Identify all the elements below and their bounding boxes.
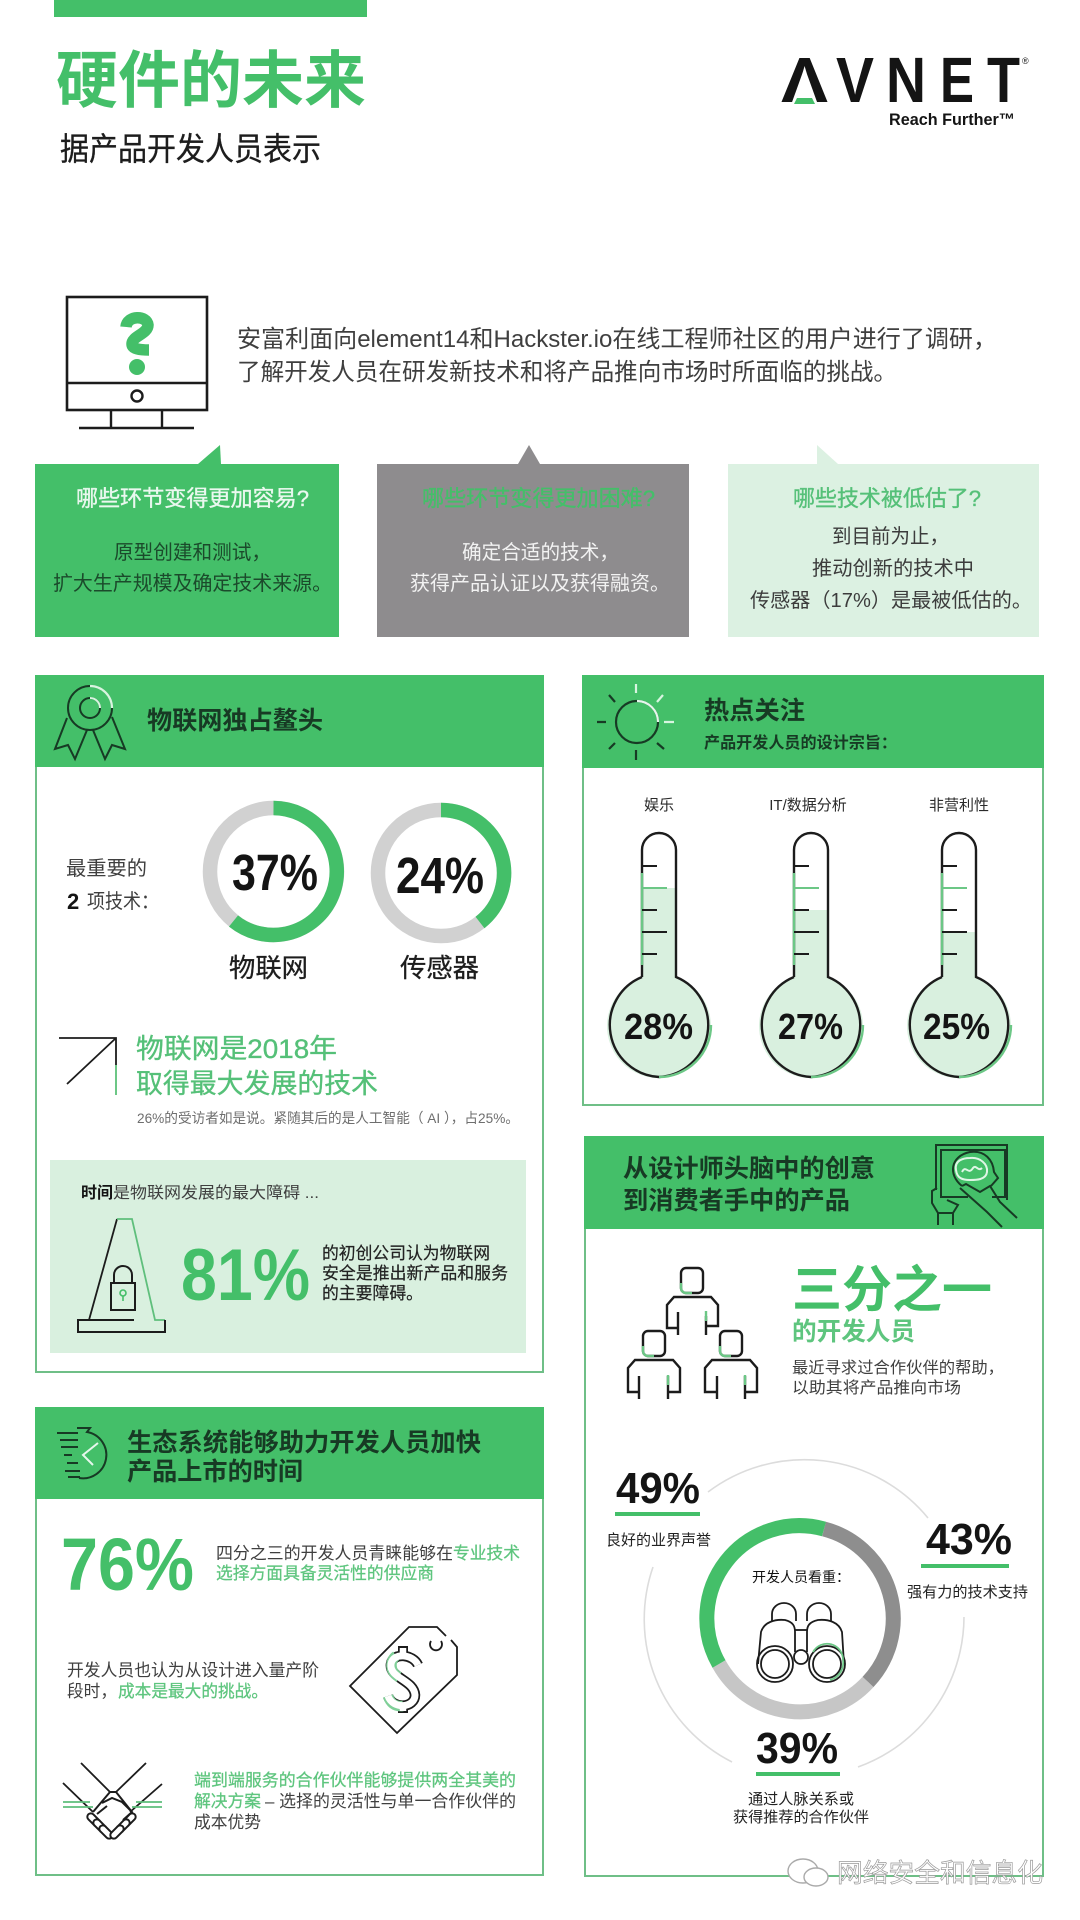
- icon: monitor with question mark: [67, 297, 207, 428]
- panel: easier: [35, 445, 339, 637]
- body: easier: 扩大生产规模及确定技术来源。: [53, 572, 332, 595]
- icon: fast clock: [57, 1428, 106, 1478]
- icon: growth arrow: [59, 1038, 116, 1095]
- thermometer: IT/data analytics 27%: 27%: [778, 1006, 843, 1047]
- logo: Avnet: [781, 44, 1029, 129]
- logo: Avnet: ®: [1022, 56, 1029, 66]
- text: end-to-end partner: 成本优势: [194, 1813, 261, 1832]
- text: end-to-end partner: [194, 1771, 516, 1832]
- donut: 37% IoT: [210, 808, 337, 935]
- text: end-to-end partner: 解决方案: [194, 1792, 261, 1811]
- thermometer: non-profit 25%: 25%: [923, 1006, 990, 1047]
- stat: 39% referrals: [733, 1724, 869, 1826]
- callout: time barrier: [50, 1160, 526, 1353]
- body: underestimated: 传感器（17%）是最被低估的。: [750, 589, 1032, 612]
- thermometer: non-profit 25%: [907, 797, 1011, 1078]
- stat: 43% tech support: [907, 1515, 1028, 1601]
- heading: ecosystem: [127, 1429, 481, 1486]
- stat description: 的初创公司认为物联网: [322, 1244, 490, 1263]
- text: top 2 technologies: 最重要的: [66, 857, 147, 880]
- thermometer: entertainment 28%: 28%: [624, 1006, 693, 1047]
- stat: 39% referrals: 获得推荐的合作伙伴: [733, 1809, 869, 1826]
- panel: harder: [377, 445, 689, 637]
- body: harder: 确定合适的技术，: [462, 541, 619, 564]
- subheading: hot topics: 产品开发人员的设计宗旨：: [704, 733, 897, 752]
- heading: ecosystem: 生态系统能够助力开发人员加快: [127, 1429, 481, 1457]
- title: 硬件的未来: [56, 47, 366, 116]
- logo: Avnet: Λ: [781, 44, 828, 116]
- stat: 39% referrals: 39%: [756, 1724, 838, 1773]
- green statement: 取得最大发展的技术: [136, 1069, 378, 1099]
- body: easier: 原型创建和测试，: [114, 541, 271, 564]
- logo: Avnet: V: [836, 44, 874, 116]
- donut: 37% IoT: 37%: [232, 844, 318, 901]
- icon: sun: [597, 684, 674, 760]
- body: underestimated: 推动创新的技术中: [812, 557, 974, 580]
- text: sought partner help: [792, 1359, 1004, 1397]
- thermometer: entertainment 28%: 娱乐: [644, 797, 674, 814]
- callout heading: 时间: [81, 1184, 113, 1202]
- body: underestimated: [750, 525, 1032, 612]
- thermometer: entertainment 28%: [607, 797, 711, 1078]
- label: IoT: 物联网: [229, 953, 308, 983]
- text: end-to-end partner: – 选择的灵活性与单一合作伙伴的: [265, 1792, 516, 1811]
- body: underestimated: 到目前为止，: [832, 525, 949, 548]
- green statement: 物联网是2018年: [136, 1034, 337, 1064]
- stat: 43% tech support: 强有力的技术支持: [907, 1584, 1028, 1601]
- heading: underestimated: 哪些技术被低估了?: [793, 486, 981, 511]
- logo: Avnet: Reach Further™: [889, 111, 1015, 129]
- icon: price tag: [350, 1627, 457, 1733]
- panel: hot topics: [582, 675, 1044, 1105]
- icon: tablet with brain: [932, 1145, 1017, 1227]
- icon: award ribbon: [55, 686, 125, 759]
- icon: binoculars: [757, 1603, 845, 1682]
- body: easier: [53, 541, 332, 595]
- donut: 24% sensors: 24%: [396, 847, 484, 904]
- stat: 76%: 76%: [61, 1523, 194, 1606]
- heading: idea to product: [623, 1154, 875, 1215]
- text: sought partner help: 最近寻求过合作伙伴的帮助，: [792, 1359, 1004, 1377]
- center label: 开发人员看重：: [752, 1569, 850, 1585]
- stat: 43% tech support: 43%: [926, 1515, 1012, 1564]
- text: flexible suppliers: [216, 1544, 520, 1583]
- heading: ecosystem: 产品上市的时间: [127, 1458, 303, 1486]
- intro text: 了解开发人员在研发新技术和将产品推向市场时所面临的挑战。: [237, 359, 897, 386]
- label: sensors: 传感器: [400, 953, 479, 983]
- panel: IoT: [35, 675, 544, 1372]
- text: top 2 technologies: [66, 857, 159, 914]
- thermometer: IT/data analytics 27%: IT/数据分析: [769, 797, 847, 814]
- icon: three people: [628, 1268, 757, 1399]
- small note: 26%的受访者如是说。紧随其后的是人工智能（ AI ），占25%。: [137, 1110, 519, 1126]
- thermometer: non-profit 25%: 非营利性: [929, 797, 989, 814]
- body: harder: 获得产品认证以及获得融资。: [410, 572, 670, 595]
- heading: easier: 哪些环节变得更加容易?: [76, 486, 309, 511]
- subtitle: 据产品开发人员表示: [60, 131, 321, 167]
- green statement: [136, 1034, 378, 1099]
- text: cost challenge: 段时，: [67, 1682, 117, 1701]
- stat: 49% reputation: 良好的业界声誉: [606, 1531, 711, 1549]
- text: flexible suppliers: 专业技术: [453, 1544, 520, 1563]
- panel: ecosystem: [35, 1407, 544, 1875]
- text: top 2 technologies: 2: [67, 889, 79, 914]
- panel: idea to product: [584, 1136, 1044, 1876]
- body: harder: [410, 541, 670, 595]
- text: flexible suppliers: 四分之三的开发人员青睐能够在: [216, 1544, 453, 1563]
- logo: Avnet: T: [987, 44, 1020, 116]
- text: end-to-end partner: 端到端服务的合作伙伴能够提供两全其美的: [194, 1771, 516, 1790]
- watermark: 网络安全和信息化: [837, 1858, 1043, 1888]
- text: cost challenge: [67, 1661, 319, 1701]
- icon: handshake: [63, 1763, 162, 1840]
- text: sought partner help: 以助其将产品推向市场: [792, 1379, 961, 1397]
- stat: one third: 三分之一: [792, 1262, 992, 1318]
- heading: harder: 哪些环节变得更加困难?: [422, 486, 655, 511]
- text: cost challenge: 开发人员也认为从设计进入量产阶: [67, 1661, 319, 1680]
- text: top 2 technologies: 项技术：: [87, 890, 159, 913]
- icon: cone with lock: [78, 1219, 165, 1332]
- logo: Avnet: E: [940, 44, 974, 116]
- stat: 49% reputation: 49%: [616, 1464, 700, 1513]
- heading: IoT: 物联网独占鳌头: [147, 707, 323, 735]
- logo: Avnet: N: [886, 44, 926, 116]
- stat description: 的主要障碍。: [322, 1284, 423, 1303]
- thermometer: IT/data analytics 27%: [759, 797, 863, 1078]
- intro text: [237, 326, 997, 386]
- stat: 81%: 81%: [181, 1235, 310, 1316]
- heading: idea to product: 到消费者手中的产品: [623, 1187, 850, 1215]
- stat: developers: 的开发人员: [792, 1318, 915, 1346]
- stat description: [322, 1244, 508, 1303]
- text: cost challenge: 成本是最大的挑战。: [118, 1682, 268, 1701]
- stat: 39% referrals: 通过人脉关系或: [748, 1791, 854, 1808]
- callout heading: 是物联网发展的最大障碍 ...: [113, 1184, 319, 1202]
- heading: hot topics: 热点关注: [704, 697, 805, 725]
- stat description: 安全是推出新产品和服务: [322, 1264, 508, 1283]
- panel: underestimated: [728, 445, 1039, 637]
- chart: developers value: [606, 1460, 1028, 1826]
- intro text: 安富利面向element14和Hackster.io在线工程师社区的用户进行了调研，: [237, 326, 997, 353]
- text: flexible suppliers: 选择方面具备灵活性的供应商: [216, 1564, 434, 1583]
- donut: 24% sensors: [378, 810, 504, 936]
- heading: idea to product: 从设计师头脑中的创意: [623, 1154, 875, 1183]
- stat: 49% reputation: [606, 1464, 711, 1549]
